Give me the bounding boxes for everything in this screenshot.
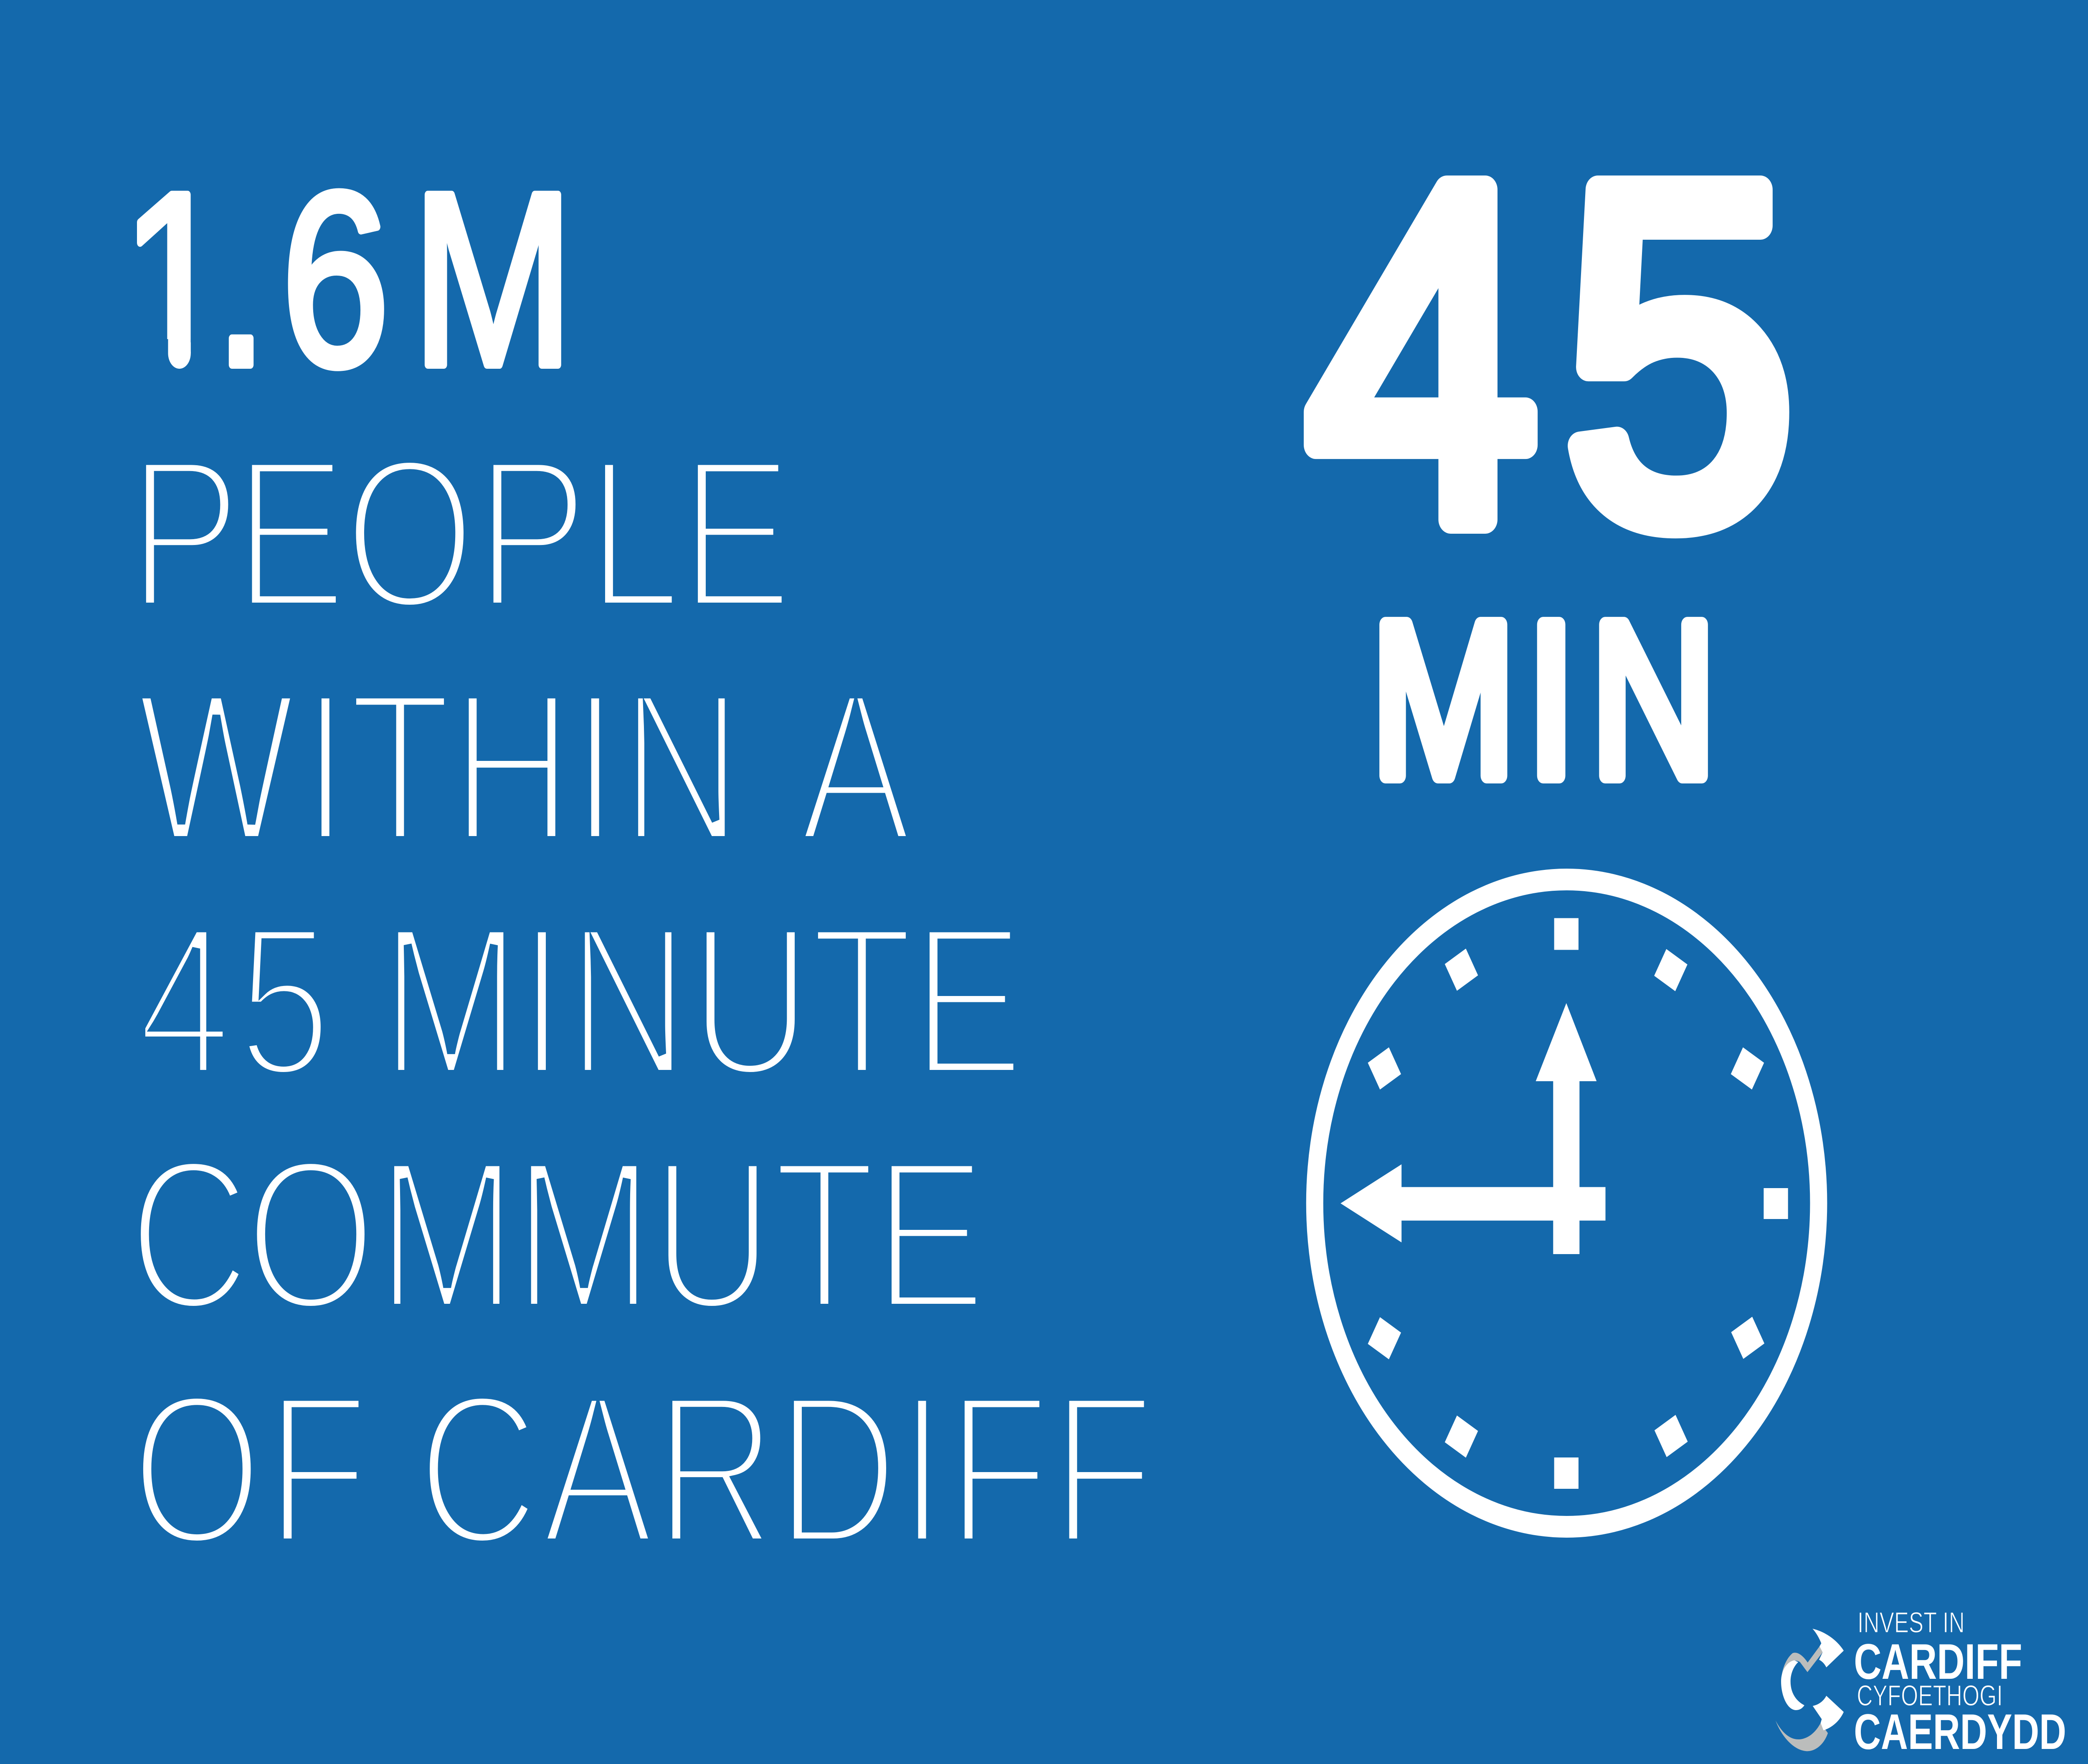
text: OF CARDIFF: OF CARDIFF xyxy=(131,1349,1155,1589)
icon: clock xyxy=(1315,879,1819,1527)
arrow: hour hand pointing left xyxy=(1340,1164,1606,1242)
text: PEOPLE: PEOPLE xyxy=(128,413,793,653)
hour ticks xyxy=(1368,918,1788,1489)
logo text: CYFOETHOGI: CYFOETHOGI xyxy=(1857,1679,2003,1712)
panel: commute statistic text xyxy=(122,141,1155,1589)
big number: 45: 45 xyxy=(1307,86,1794,621)
label: MIN: MIN xyxy=(1371,577,1716,823)
text: WITHIN A: WITHIN A xyxy=(136,647,913,887)
logo: Invest in Cardiff / Cyfoethogi Caerdydd xyxy=(1776,1606,2066,1760)
text: COMMUTE: COMMUTE xyxy=(128,1115,986,1354)
text: 45 MINUTE: 45 MINUTE xyxy=(137,881,1024,1120)
heading: 1.6M: 1.6M xyxy=(122,141,574,418)
arrow: minute hand pointing up xyxy=(1536,1003,1596,1254)
clock face ring xyxy=(1315,879,1819,1527)
logo text: CARDIFF: CARDIFF xyxy=(1854,1634,2022,1690)
logo text: CAERDYDD: CAERDYDD xyxy=(1854,1704,2066,1760)
logo text: INVEST IN: INVEST IN xyxy=(1857,1606,1965,1639)
logo mark xyxy=(1776,1629,1844,1751)
